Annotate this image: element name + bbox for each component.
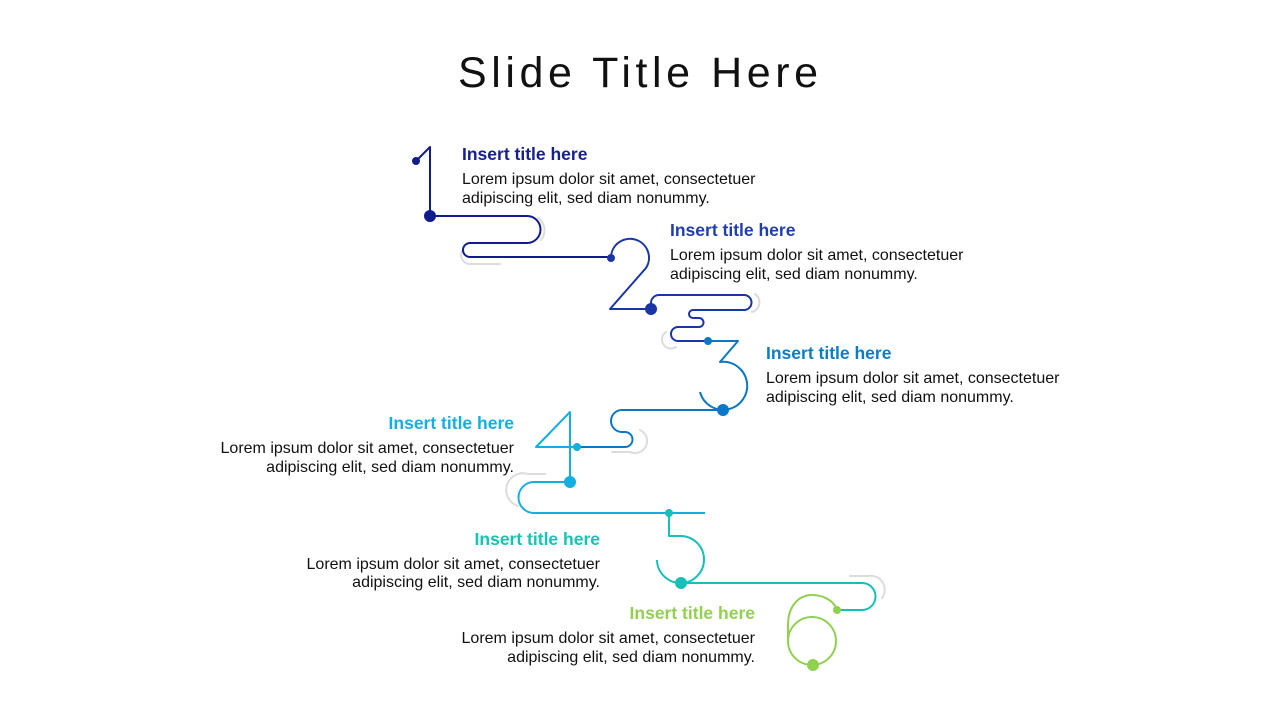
text block 3: Insert title here (766, 343, 892, 363)
text block 4: adipiscing elit, sed diam nonummy. (266, 459, 514, 476)
text block 5 (307, 529, 601, 591)
text block 1: Lorem ipsum dolor sit amet, consectetuer (462, 171, 756, 188)
text block 3: adipiscing elit, sed diam nonummy. (766, 389, 1014, 406)
numeral 6 path (788, 595, 840, 670)
decorative shadows (461, 218, 885, 598)
numeral 5 path (657, 510, 876, 610)
numeral 3 path (577, 338, 747, 447)
text block 1: adipiscing elit, sed diam nonummy. (462, 190, 710, 207)
numeral 4 path (518, 412, 705, 513)
text block 4: Lorem ipsum dolor sit amet, consectetuer (221, 440, 515, 457)
text block 4: Insert title here (389, 413, 514, 433)
text block 2 (670, 220, 964, 283)
text block 6: Insert title here (630, 603, 755, 623)
text block 3 (766, 343, 1060, 406)
text block 5: Insert title here (475, 529, 600, 549)
text block 2: Lorem ipsum dolor sit amet, consectetuer (670, 247, 964, 264)
text block 6: Lorem ipsum dolor sit amet, consectetuer (462, 630, 756, 647)
title: Slide Title Here (458, 49, 818, 97)
text block 6 (462, 603, 756, 666)
text block 5: adipiscing elit, sed diam nonummy. (352, 574, 600, 591)
numeral 2 path (608, 239, 752, 341)
text block 1 (462, 144, 756, 207)
text block 6: adipiscing elit, sed diam nonummy. (507, 649, 755, 666)
numeral 1 path (413, 147, 611, 257)
text block 1: Insert title here (462, 144, 588, 164)
text block 4 (221, 413, 515, 476)
text block 3: Lorem ipsum dolor sit amet, consectetuer (766, 370, 1060, 387)
text block 2: adipiscing elit, sed diam nonummy. (670, 266, 918, 283)
text block 2: Insert title here (670, 220, 796, 240)
text block 5: Lorem ipsum dolor sit amet, consectetuer (307, 556, 601, 573)
